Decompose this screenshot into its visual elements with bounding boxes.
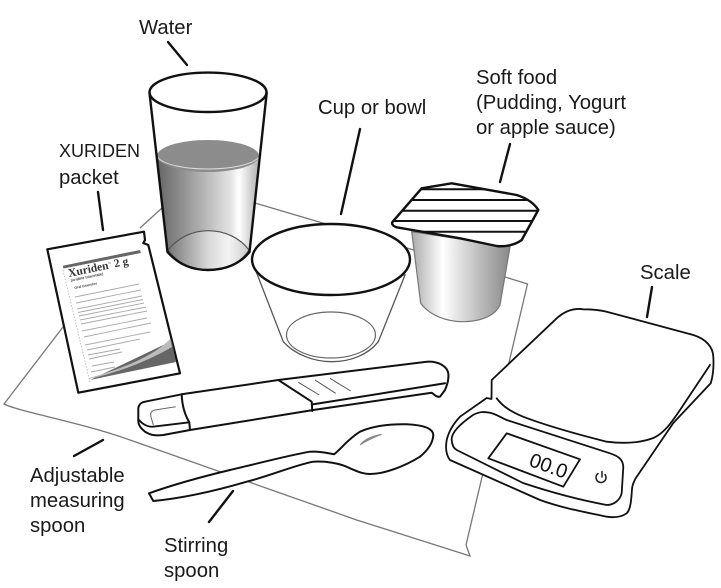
icon: stirring spoon (149, 424, 433, 501)
label: stirring spoon: spoon (164, 560, 219, 582)
icon: XURIDEN packet: Xuriden (67, 260, 110, 280)
icon: XURIDEN packet: 2 g (110, 256, 130, 271)
leader line: stirring spoon (209, 491, 233, 522)
label: XURIDEN packet: XURIDEN (59, 141, 140, 161)
label: water: Water (139, 17, 193, 39)
label: adjustable measuring spoon: measuring (30, 490, 125, 512)
leader line: water (168, 42, 187, 65)
label: stirring spoon: Stirring (164, 535, 228, 557)
paper mat (4, 203, 528, 556)
icon: kitchen scale (446, 309, 714, 517)
label: scale: Scale (640, 262, 691, 284)
leader line: soft food (500, 144, 510, 182)
leader line: measuring spoon (74, 440, 103, 456)
leader line: scale (647, 287, 652, 317)
icon: adjustable measuring spoon (138, 362, 448, 435)
leader line: packet (98, 192, 103, 230)
label: adjustable measuring spoon: Adjustable (30, 465, 125, 487)
label: soft food: or apple sauce) (476, 117, 616, 139)
icon: power button (596, 472, 606, 482)
label: XURIDEN packet: packet (59, 167, 119, 189)
leader line: cup (341, 129, 360, 214)
icon: soft food cup (390, 183, 545, 322)
label: adjustable measuring spoon: spoon (30, 515, 85, 537)
icon: glass of water (150, 73, 267, 270)
icon: kitchen scale: 00.0 (526, 450, 570, 484)
icon: XURIDEN packet: (uridine triacetate) (70, 272, 104, 283)
scale display (488, 433, 580, 487)
icon: XURIDEN packet: ™ (108, 261, 111, 266)
label: cup or bowl: Cup or bowl (318, 97, 426, 119)
label: soft food: Soft food (476, 67, 557, 89)
icon: XURIDEN packet: Oral Granules (74, 281, 98, 290)
icon: XURIDEN packet (47, 232, 180, 393)
label: soft food: (Pudding, Yogurt (476, 92, 626, 114)
icon: cup or bowl (252, 224, 410, 362)
